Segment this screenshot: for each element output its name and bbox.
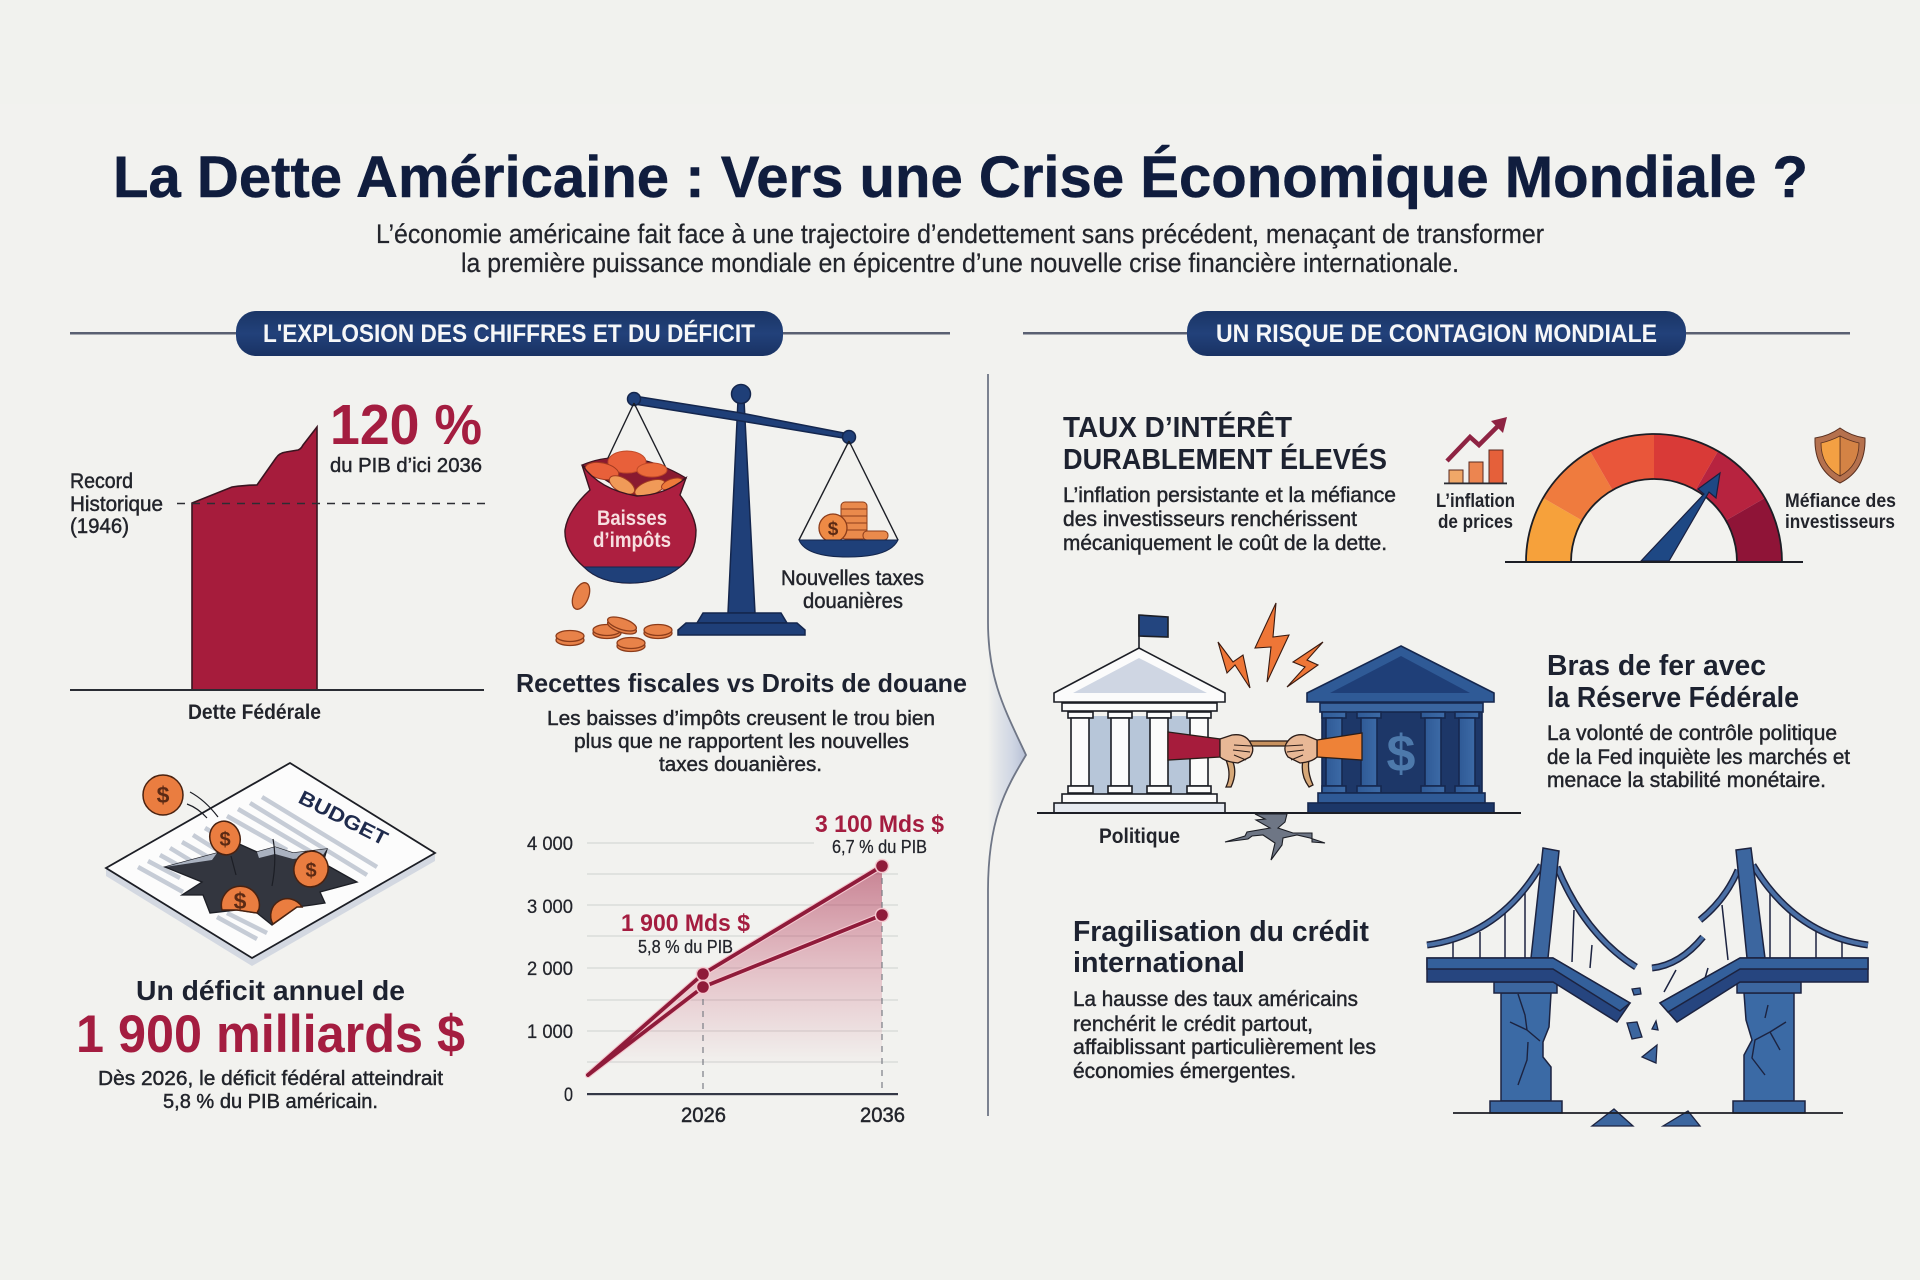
illustration: budget hole: $ [234,888,247,914]
bridge ground line [1453,1112,1843,1114]
gauge needle [1641,473,1720,561]
text block: interest rates: des investisseurs renchérissent [1063,508,1357,531]
towers and decks [1427,848,1868,1113]
callout: 2026: 1 900 Mds $ [621,910,751,937]
fallen coins [556,580,672,652]
label: record historique: Historique [70,493,163,516]
paper [106,853,435,966]
stat: annual deficit: Dès 2026, le déficit fédéral atteindrait [98,1067,443,1090]
text block: interest rates: TAUX D’INTÉRÊT [1063,410,1292,444]
political building [1054,615,1225,813]
coins [143,775,333,924]
scale stand [628,384,856,635]
text block: international credit [1073,916,1376,1083]
text block: interest rates: L’inflation persistante et la méfiance [1063,484,1396,507]
x axis labels: 2026 [681,1104,726,1127]
label: politique: Politique [1099,825,1180,848]
text block: federal reserve: La volonté de contrôle politique [1547,722,1837,745]
area fill [588,866,882,1094]
callout: 2026: 5,8 % du PIB [638,936,733,957]
section header: right [1023,311,1850,356]
y axis labels: 2 000 [527,958,573,980]
illustration: budget hole: $ [219,829,231,851]
grid lines [587,843,898,1062]
chart: federal debt [70,393,485,724]
text block: international credit: économies émergentes. [1073,1060,1296,1083]
y axis labels: 1 000 [527,1021,573,1043]
callout: 2036: 3 100 Mds $ [815,811,945,838]
label: record historique [70,470,163,538]
text block: tax revenue vs customs: Recettes fiscales vs Droits de douane [516,668,967,698]
icon: shield [1815,428,1865,483]
title: La Dette Américaine : Vers une Crise Économique Mondiale ? [113,145,1808,210]
illustration: budget hole [106,763,435,966]
central bank building [1307,646,1494,813]
budget label: BUDGET [295,787,391,850]
right pan with coins [799,502,898,557]
subtitle: la première puissance mondiale en épicentre d’une nouvelle crise financière internationale. [461,248,1459,278]
data points [696,860,888,994]
subtitle: L’économie américaine fait face à une trajectoire d’endettement sans précédent, menaçant de transformer [376,219,1544,249]
text block: federal reserve: menace la stabilité monétaire. [1547,769,1826,792]
icon: inflation chart [1444,417,1507,484]
text block: tax revenue vs customs [516,668,967,776]
stat: 120 %: du PIB d’ici 2036 [330,454,482,477]
data lines [588,866,882,1075]
dollar sign: $ [1387,725,1416,783]
label: investor distrust: Méfiance des [1785,490,1896,512]
section header: left: L'EXPLOSION DES CHIFFRES ET DU DÉFICIT [263,319,755,348]
stat: 120 %: 120 % [330,393,482,457]
section header: right: UN RISQUE DE CONTAGION MONDIALE [1216,320,1657,348]
right pan with coins: $ [828,519,839,540]
ground line [1037,812,1521,814]
bag of tax cuts: Baisses [597,507,667,530]
hole [165,843,357,925]
bag of tax cuts: d’impôts [593,529,671,552]
illustration: budget hole: $ [305,860,317,882]
y axis labels [527,833,573,1106]
stat: annual deficit: 5,8 % du PIB américain. [163,1090,378,1113]
y axis labels: 4 000 [527,833,573,855]
text block: international credit: affaiblissant particulièrement les [1073,1036,1376,1059]
ground crack [1225,814,1325,860]
pier cracks [1510,994,1786,1085]
label: new customs duties: Nouvelles taxes [781,567,924,590]
hangers [1453,892,1842,995]
axis label: Dette Fédérale [188,701,321,724]
text block: international credit: international [1073,947,1245,979]
gauge [1505,434,1803,563]
text block: interest rates [1063,410,1396,555]
subtitle [376,219,1544,278]
text block: federal reserve: la Réserve Fédérale [1547,682,1799,714]
callout: 2036 [815,811,945,857]
illustration: politics vs fed tug of war [1037,603,1521,860]
label: inflation: de prices [1438,511,1513,533]
cables [1427,865,1868,968]
label: record historique: (1946) [70,515,129,538]
debris [1592,988,1700,1126]
stat: annual deficit: Un déficit annuel de [136,975,405,1006]
text block: interest rates: DURABLEMENT ÉLEVÉS [1063,442,1387,476]
text block: federal reserve: de la Fed inquiète les marchés et [1547,746,1850,769]
text block: federal reserve: Bras de fer avec [1547,650,1766,682]
text block: international credit: La hausse des taux américains [1073,988,1358,1011]
panel divider with arrow [988,374,1026,1116]
arms and rope [1168,732,1362,787]
chart: deficit line chart [527,811,945,1127]
text block: international credit: renchérit le crédit partout, [1073,1013,1313,1036]
label: new customs duties [781,567,924,613]
illustration: broken bridge [1427,848,1868,1126]
callout: 2036: 6,7 % du PIB [832,836,927,857]
callout: 2026 [621,910,751,957]
text block: federal reserve [1547,650,1850,792]
illustration: budget hole: $ [157,782,170,808]
lightning bolts [1218,603,1323,688]
stat: annual deficit [76,975,465,1113]
illustration: balance scale [556,384,924,652]
label: investor distrust [1785,490,1896,533]
label: inflation [1436,490,1515,533]
label: investor distrust: investisseurs [1785,511,1895,533]
text block: tax revenue vs customs: taxes douanières. [659,753,822,776]
bag of tax cuts [565,451,696,583]
label: inflation: L’inflation [1436,490,1515,512]
label: new customs duties: douanières [803,590,903,613]
text block: tax revenue vs customs: plus que ne rapportent les nouvelles [574,730,909,753]
section header: left [70,311,950,356]
text block: interest rates: mécaniquement le coût de la dette. [1063,532,1387,555]
x axis labels: 2036 [860,1104,905,1127]
y axis labels: 0 [564,1084,573,1106]
label: record historique: Record [70,470,133,493]
debt area [192,427,317,690]
strings [607,403,898,540]
text block: tax revenue vs customs: Les baisses d’impôts creusent le trou bien [547,707,935,730]
x axis labels [681,1104,905,1127]
y axis labels: 3 000 [527,896,573,918]
stat: annual deficit: 1 900 milliards $ [76,1005,465,1064]
text block: international credit: Fragilisation du crédit [1073,916,1369,948]
